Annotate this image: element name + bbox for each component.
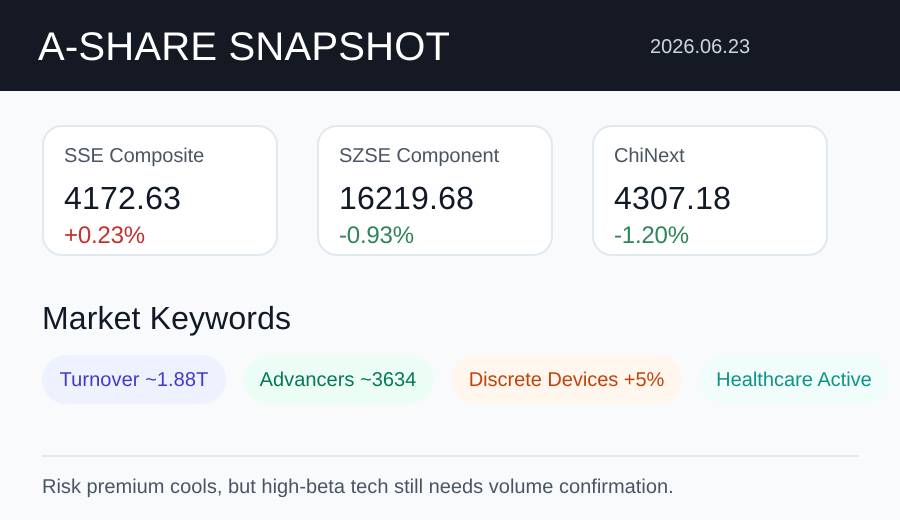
date: 2026.06.23 xyxy=(650,36,750,58)
card: SZSE Component: 16219.68 xyxy=(339,180,474,216)
card: SZSE Component: SZSE Component xyxy=(339,145,499,167)
keyword pill: discrete devices: Discrete Devices +5% xyxy=(469,369,664,391)
card: SSE Composite xyxy=(42,125,278,256)
card: ChiNext: ChiNext xyxy=(614,145,685,167)
keyword pill: turnover: Turnover ~1.88T xyxy=(60,369,208,391)
keyword pill: healthcare xyxy=(699,355,889,404)
card: SSE Composite: 4172.63 xyxy=(64,180,181,216)
footer note: Risk premium cools, but high-beta tech still needs volume confirmation. xyxy=(42,476,674,498)
card: SSE Composite: +0.23% xyxy=(64,222,145,249)
card: SZSE Component xyxy=(317,125,553,256)
card: SSE Composite: SSE Composite xyxy=(64,145,204,167)
section heading: Market Keywords xyxy=(42,300,291,336)
card: ChiNext: -1.20% xyxy=(614,222,689,249)
keyword pill: healthcare: Healthcare Active xyxy=(716,369,872,391)
keyword pill: turnover xyxy=(42,355,226,404)
card: SZSE Component: -0.93% xyxy=(339,222,414,249)
title: A-SHARE SNAPSHOT xyxy=(38,25,450,69)
keyword pill: advancers xyxy=(243,355,434,404)
keyword pill: advancers: Advancers ~3634 xyxy=(260,369,416,391)
header band xyxy=(0,0,900,91)
keyword pill: discrete devices xyxy=(451,355,682,404)
card: ChiNext xyxy=(592,125,828,256)
card: ChiNext: 4307.18 xyxy=(614,180,731,216)
